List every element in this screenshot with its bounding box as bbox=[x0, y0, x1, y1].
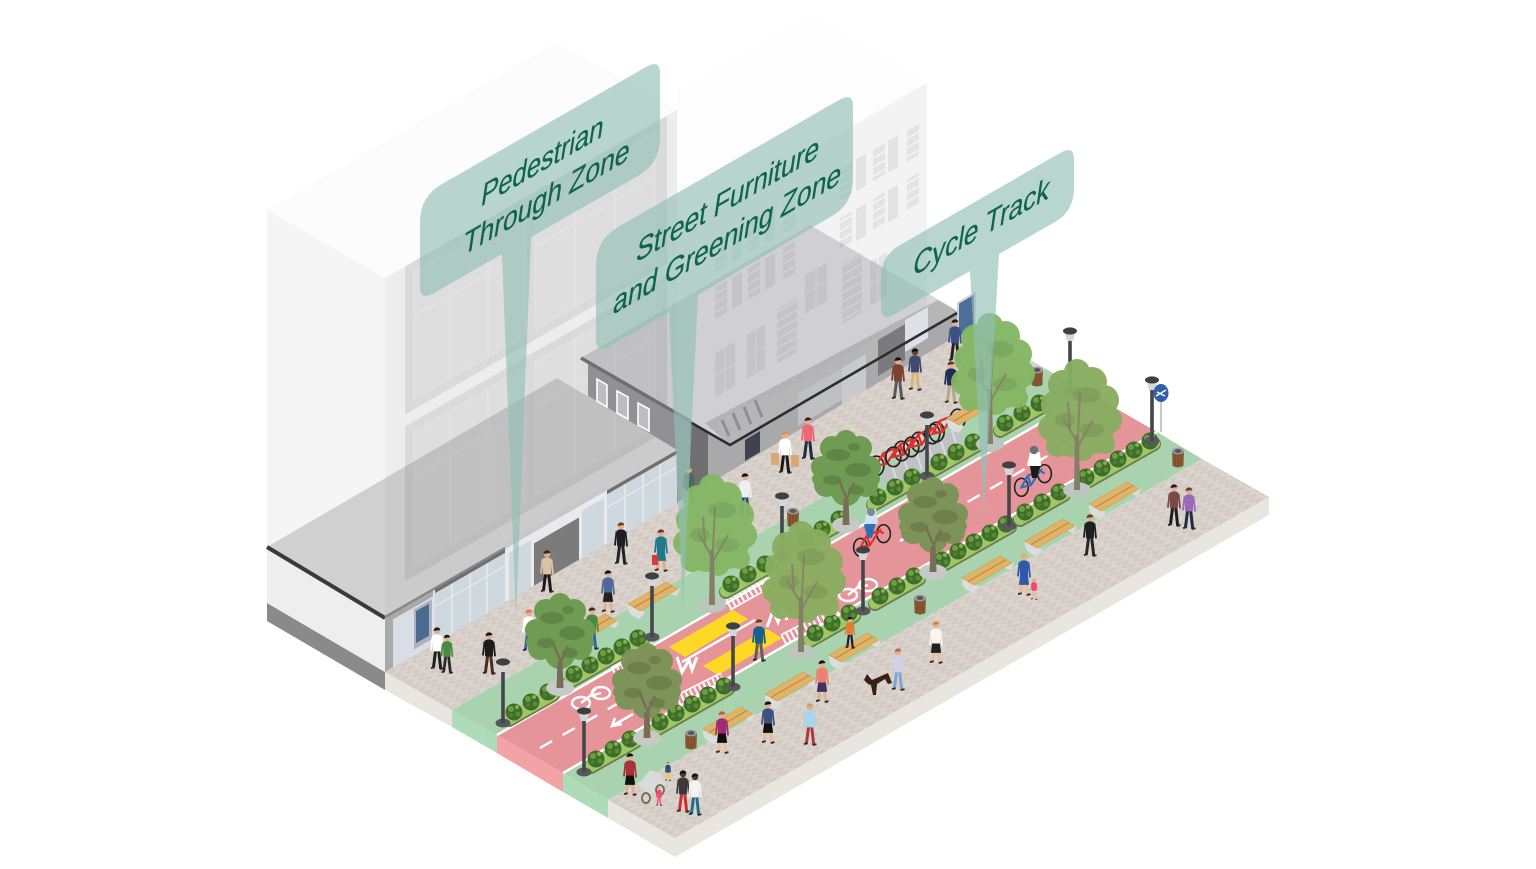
street lamp bbox=[920, 411, 934, 480]
litter bin bbox=[914, 595, 926, 614]
dog bbox=[864, 673, 892, 695]
bench bbox=[947, 396, 999, 433]
litter bin bbox=[1172, 448, 1184, 468]
person bbox=[441, 635, 453, 673]
person bbox=[930, 621, 943, 663]
label line: and Greening Zone bbox=[611, 155, 844, 323]
callout: Cycle Track bbox=[881, 150, 1074, 515]
label line: Through Zone bbox=[461, 131, 633, 264]
person bbox=[945, 361, 958, 403]
tree bbox=[1038, 359, 1122, 498]
person bbox=[615, 522, 628, 564]
planter bbox=[722, 556, 774, 592]
people by the near building bbox=[431, 319, 962, 674]
planter bbox=[870, 468, 920, 506]
litter bin bbox=[1031, 367, 1043, 386]
child bbox=[1031, 579, 1037, 600]
person bbox=[739, 473, 752, 515]
person bbox=[892, 357, 905, 399]
person bbox=[1018, 553, 1031, 595]
planter bbox=[1078, 432, 1158, 486]
bench bbox=[703, 707, 755, 744]
person bbox=[586, 607, 599, 649]
planter bbox=[934, 516, 1014, 568]
person bbox=[816, 660, 829, 702]
person bbox=[431, 627, 444, 669]
planter bbox=[588, 730, 638, 768]
label line: Street Furniture bbox=[634, 129, 822, 271]
person bbox=[541, 550, 554, 592]
street lamp bbox=[1062, 327, 1078, 396]
greening strip, building side bbox=[452, 369, 1091, 735]
runner bbox=[716, 711, 729, 753]
cycle track markings bbox=[497, 394, 1157, 773]
ground slab: front and side edges bbox=[385, 497, 1269, 857]
litter bin bbox=[685, 730, 697, 750]
bike rack bbox=[882, 427, 962, 487]
callout: Pedestrian Through Zone bbox=[420, 64, 660, 618]
child bbox=[665, 762, 671, 781]
tree bbox=[762, 521, 846, 660]
planter bbox=[930, 434, 982, 470]
street lamp bbox=[856, 546, 870, 616]
planter bbox=[1016, 484, 1068, 520]
person bbox=[1168, 484, 1181, 526]
street lamp bbox=[726, 622, 740, 692]
person bbox=[802, 417, 815, 459]
cycle route sign bbox=[1154, 384, 1168, 432]
person bbox=[677, 770, 690, 812]
cycle track bbox=[497, 394, 1157, 773]
person bbox=[804, 703, 817, 745]
bench bbox=[829, 633, 881, 670]
person bbox=[949, 319, 962, 361]
tree bbox=[951, 313, 1035, 452]
person bbox=[909, 348, 922, 390]
tree bbox=[811, 430, 881, 533]
cyclist: light blue shirt on red bike bbox=[854, 508, 890, 556]
planter bbox=[652, 678, 732, 730]
callout: Street Furniture and Greening Zone bbox=[596, 97, 853, 610]
person bbox=[1183, 487, 1196, 529]
bike share bicycles bbox=[869, 409, 965, 476]
building: small block roof, side and storefront bbox=[581, 225, 975, 503]
person crossing cycle track bbox=[753, 619, 766, 661]
bench bbox=[567, 614, 619, 651]
pedestrian through zone paving bbox=[385, 331, 1046, 710]
bench bbox=[765, 672, 817, 709]
planter bbox=[996, 394, 1048, 432]
cyclist: white shirt on blue bike bbox=[1015, 446, 1051, 496]
bench bbox=[1089, 482, 1141, 519]
person bbox=[483, 632, 496, 674]
child bbox=[656, 787, 662, 806]
street lamp bbox=[496, 658, 510, 728]
building: near block ground floor bbox=[267, 378, 677, 690]
person with pram bbox=[624, 753, 637, 795]
pram bbox=[638, 770, 664, 803]
person with dog bbox=[892, 648, 905, 690]
shopping bags bbox=[652, 453, 799, 565]
planter bbox=[806, 604, 858, 642]
people on the far paving bbox=[624, 484, 1196, 815]
street lamp bbox=[644, 572, 660, 642]
person bbox=[684, 467, 695, 504]
street lamp bbox=[576, 707, 592, 776]
tree bbox=[898, 477, 968, 580]
planter bbox=[506, 684, 556, 720]
person bbox=[655, 529, 668, 571]
person bbox=[689, 773, 702, 815]
planter bbox=[796, 510, 848, 548]
street lamp bbox=[1002, 461, 1016, 530]
person bbox=[1084, 514, 1097, 556]
runner bbox=[762, 701, 775, 743]
label line: Pedestrian bbox=[479, 108, 606, 215]
tree bbox=[673, 474, 757, 613]
building: far ghost block bbox=[677, 15, 927, 450]
street lamp bbox=[1144, 376, 1160, 446]
building: near ghost block bbox=[267, 42, 677, 618]
far side paving bbox=[608, 459, 1269, 838]
person bbox=[602, 570, 615, 612]
person with shopping bags bbox=[779, 431, 792, 473]
street lamp bbox=[774, 492, 790, 562]
greening strip, kerb side bbox=[563, 432, 1202, 800]
bench bbox=[962, 556, 1014, 593]
litter bin bbox=[787, 508, 799, 528]
person bbox=[523, 609, 536, 651]
person sitting on bench bbox=[845, 617, 855, 648]
bench bbox=[628, 582, 680, 619]
planter bbox=[566, 630, 646, 682]
tree bbox=[612, 643, 682, 746]
planter bbox=[872, 568, 922, 604]
label line: Cycle Track bbox=[911, 169, 1053, 285]
tree bbox=[525, 593, 595, 696]
bench bbox=[1025, 519, 1077, 556]
